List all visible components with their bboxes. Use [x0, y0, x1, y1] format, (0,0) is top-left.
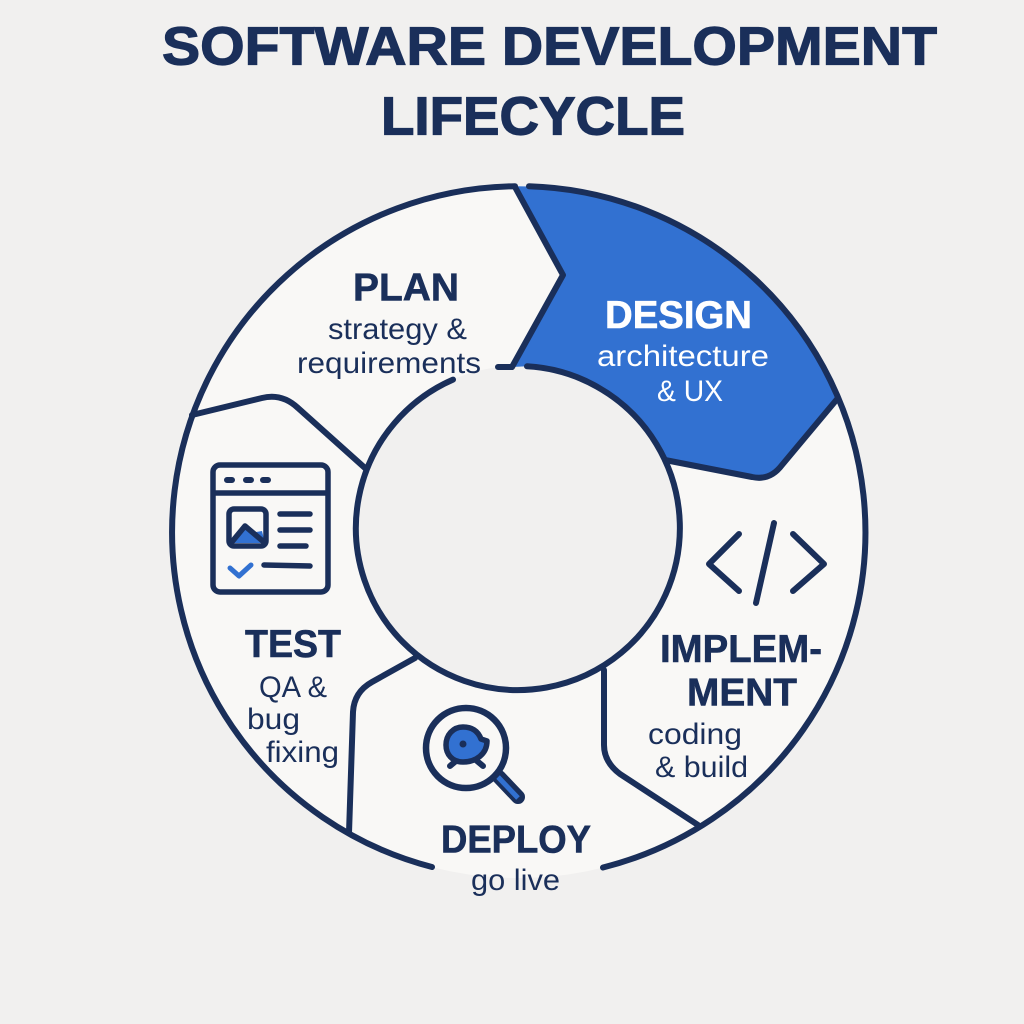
title: [162, 16, 937, 146]
icon: test window: [213, 465, 328, 592]
panel: test: QA &: [259, 671, 327, 704]
panel: implement: & build: [655, 751, 748, 784]
panel: implement: [648, 628, 822, 784]
panel: test: [245, 623, 341, 769]
panel: implement: IMPLEM-: [660, 628, 822, 671]
panel: test: bug: [247, 703, 300, 736]
panel: design: & UX: [657, 375, 723, 408]
panel: deploy: go live: [471, 864, 560, 897]
panel: test: TEST: [245, 623, 341, 666]
ring background: [171, 186, 866, 878]
panel: test: fixing: [266, 736, 339, 769]
panel: deploy: DEPLOY: [441, 818, 591, 862]
panel: plan: [297, 266, 481, 380]
icon: code brackets: [709, 523, 824, 603]
panel: plan: PLAN: [353, 266, 459, 310]
title: LIFECYCLE: [381, 86, 685, 146]
title: SOFTWARE DEVELOPMENT: [162, 16, 937, 76]
icon: magnifier with bug: [426, 708, 518, 798]
panel: deploy: [441, 818, 591, 897]
panel: plan: strategy &: [328, 313, 467, 346]
ring outlines: [172, 186, 865, 867]
panel: design: [597, 294, 769, 408]
panel: design segment: [512, 186, 838, 478]
panel: implement: MENT: [687, 672, 797, 714]
lifecycle ring: [171, 186, 866, 897]
panel: plan: requirements: [297, 347, 481, 380]
panel: implement: coding: [648, 718, 742, 751]
panel: design: architecture: [597, 340, 769, 373]
panel: design: DESIGN: [605, 294, 752, 337]
